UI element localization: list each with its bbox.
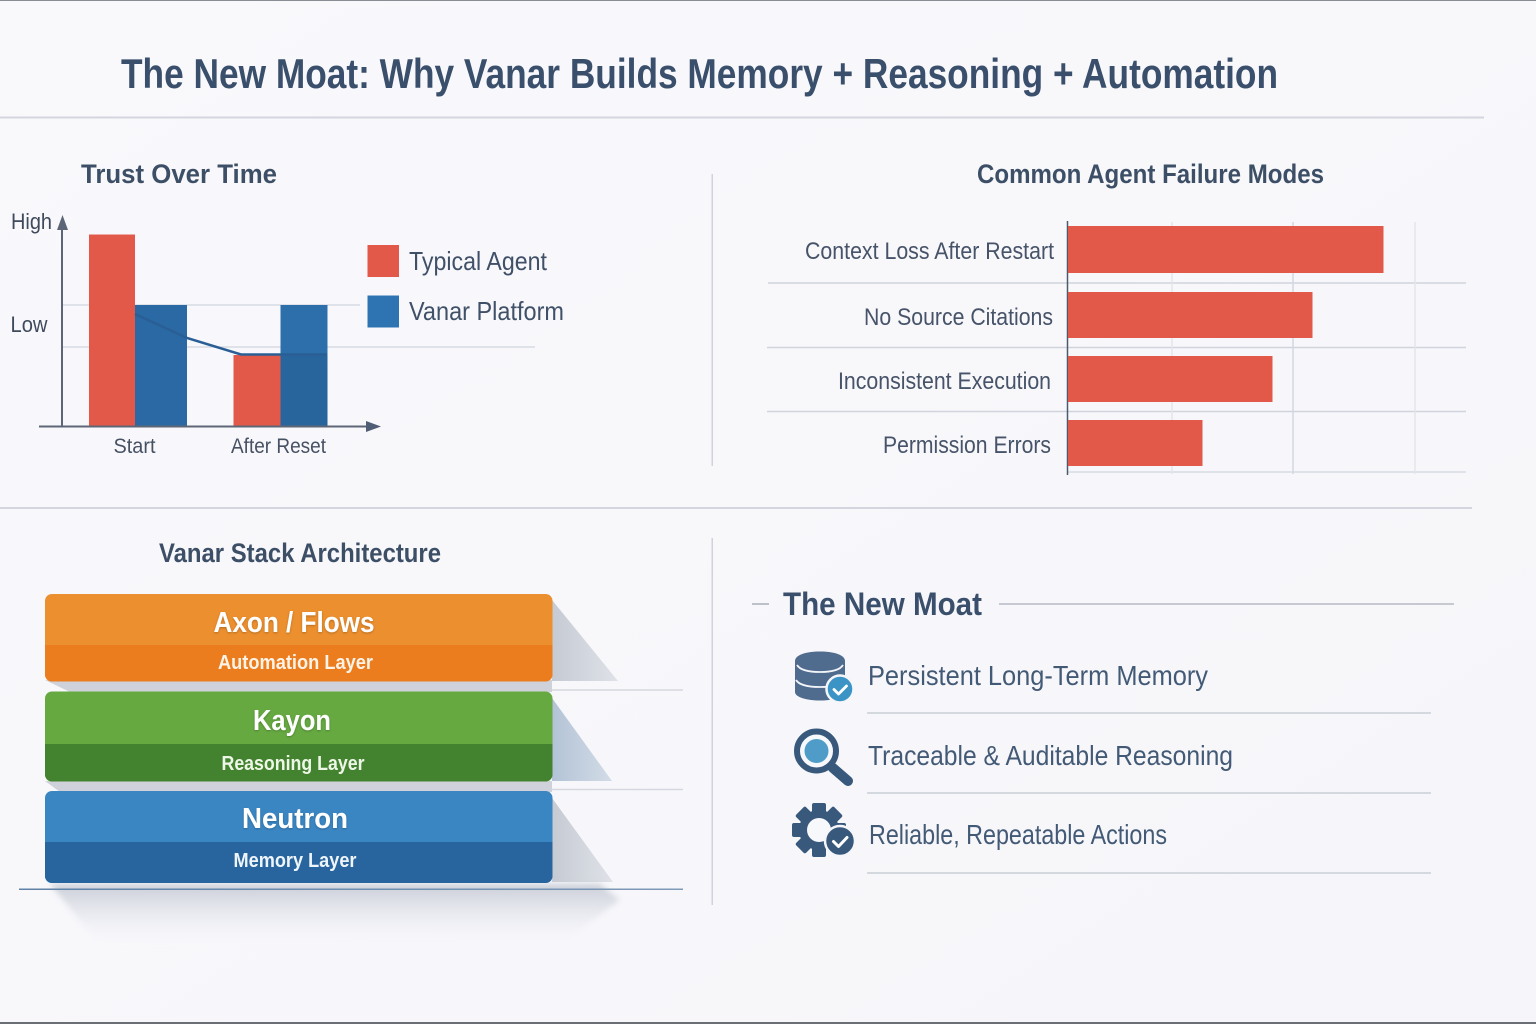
y axis [57, 215, 68, 427]
bar: inconsistent execution: Inconsistent Execution [838, 368, 1051, 395]
legend: typical agent [368, 245, 548, 277]
icon: database with check [795, 652, 854, 702]
bar: no source citations: No Source Citations [864, 304, 1053, 331]
bar: context loss after restart [805, 226, 1384, 273]
legend: typical agent: Typical Agent [409, 246, 548, 276]
bar: vanar platform at start [135, 305, 187, 426]
label: after reset: After Reset [231, 435, 326, 458]
bar: typical agent at start [89, 234, 135, 426]
panel: common agent failure modes [767, 159, 1466, 475]
panel: vanar stack architecture [19, 538, 683, 945]
bar: vanar platform after reset [280, 305, 328, 426]
bar: typical agent after reset [234, 355, 280, 426]
trend line [135, 314, 327, 354]
icon: gear with check [792, 803, 855, 857]
layer: neutron: Memory Layer [234, 850, 357, 872]
layer: kayon [45, 692, 552, 782]
label: start: Start [114, 435, 156, 458]
cast shadows [45, 600, 620, 945]
layer: axon / flows [45, 594, 552, 682]
label: low: Low [10, 312, 48, 337]
layer: axon / flows: Automation Layer [218, 652, 373, 674]
heading: stack architecture: Vanar Stack Architecture [159, 538, 441, 568]
x axis [39, 421, 381, 432]
legend: vanar platform: Vanar Platform [409, 296, 564, 326]
text: persistent long-term memory: Persistent Long-Term Memory [868, 660, 1208, 691]
layer: neutron: Neutron [242, 803, 348, 835]
layer: kayon: Kayon [253, 705, 331, 737]
heading: the new moat: The New Moat [783, 586, 982, 622]
base line [19, 888, 683, 890]
icon: magnifying glass [797, 732, 848, 781]
bar: permission errors [883, 420, 1202, 466]
label: high: High [11, 209, 52, 234]
text: traceable and auditable reasoning: Traceable & Auditable Reasoning [868, 740, 1233, 771]
bar: no source citations [864, 292, 1312, 338]
heading: trust over time: Trust Over Time [81, 159, 277, 189]
text: reliable, repeatable actions: Reliable, Repeatable Actions [869, 819, 1167, 850]
bar: permission errors: Permission Errors [883, 432, 1051, 459]
panel: the new moat [752, 586, 1454, 873]
layer: axon / flows: Axon / Flows [214, 607, 374, 639]
legend: vanar platform [368, 296, 564, 328]
heading: failure modes: Common Agent Failure Modes [977, 159, 1324, 189]
bar chart: trust over time [10, 209, 535, 458]
layer: neutron [45, 791, 552, 883]
bar: context loss after restart: Context Loss After Restart [805, 238, 1054, 265]
layer: kayon: Reasoning Layer [222, 753, 365, 775]
bar: inconsistent execution [838, 356, 1272, 402]
legend [368, 245, 564, 328]
title: The New Moat: Why Vanar Builds Memory + Reasoning + Automation [121, 50, 1278, 97]
panel: trust over time [10, 159, 564, 458]
horizontal bar chart: failure modes [767, 221, 1466, 475]
